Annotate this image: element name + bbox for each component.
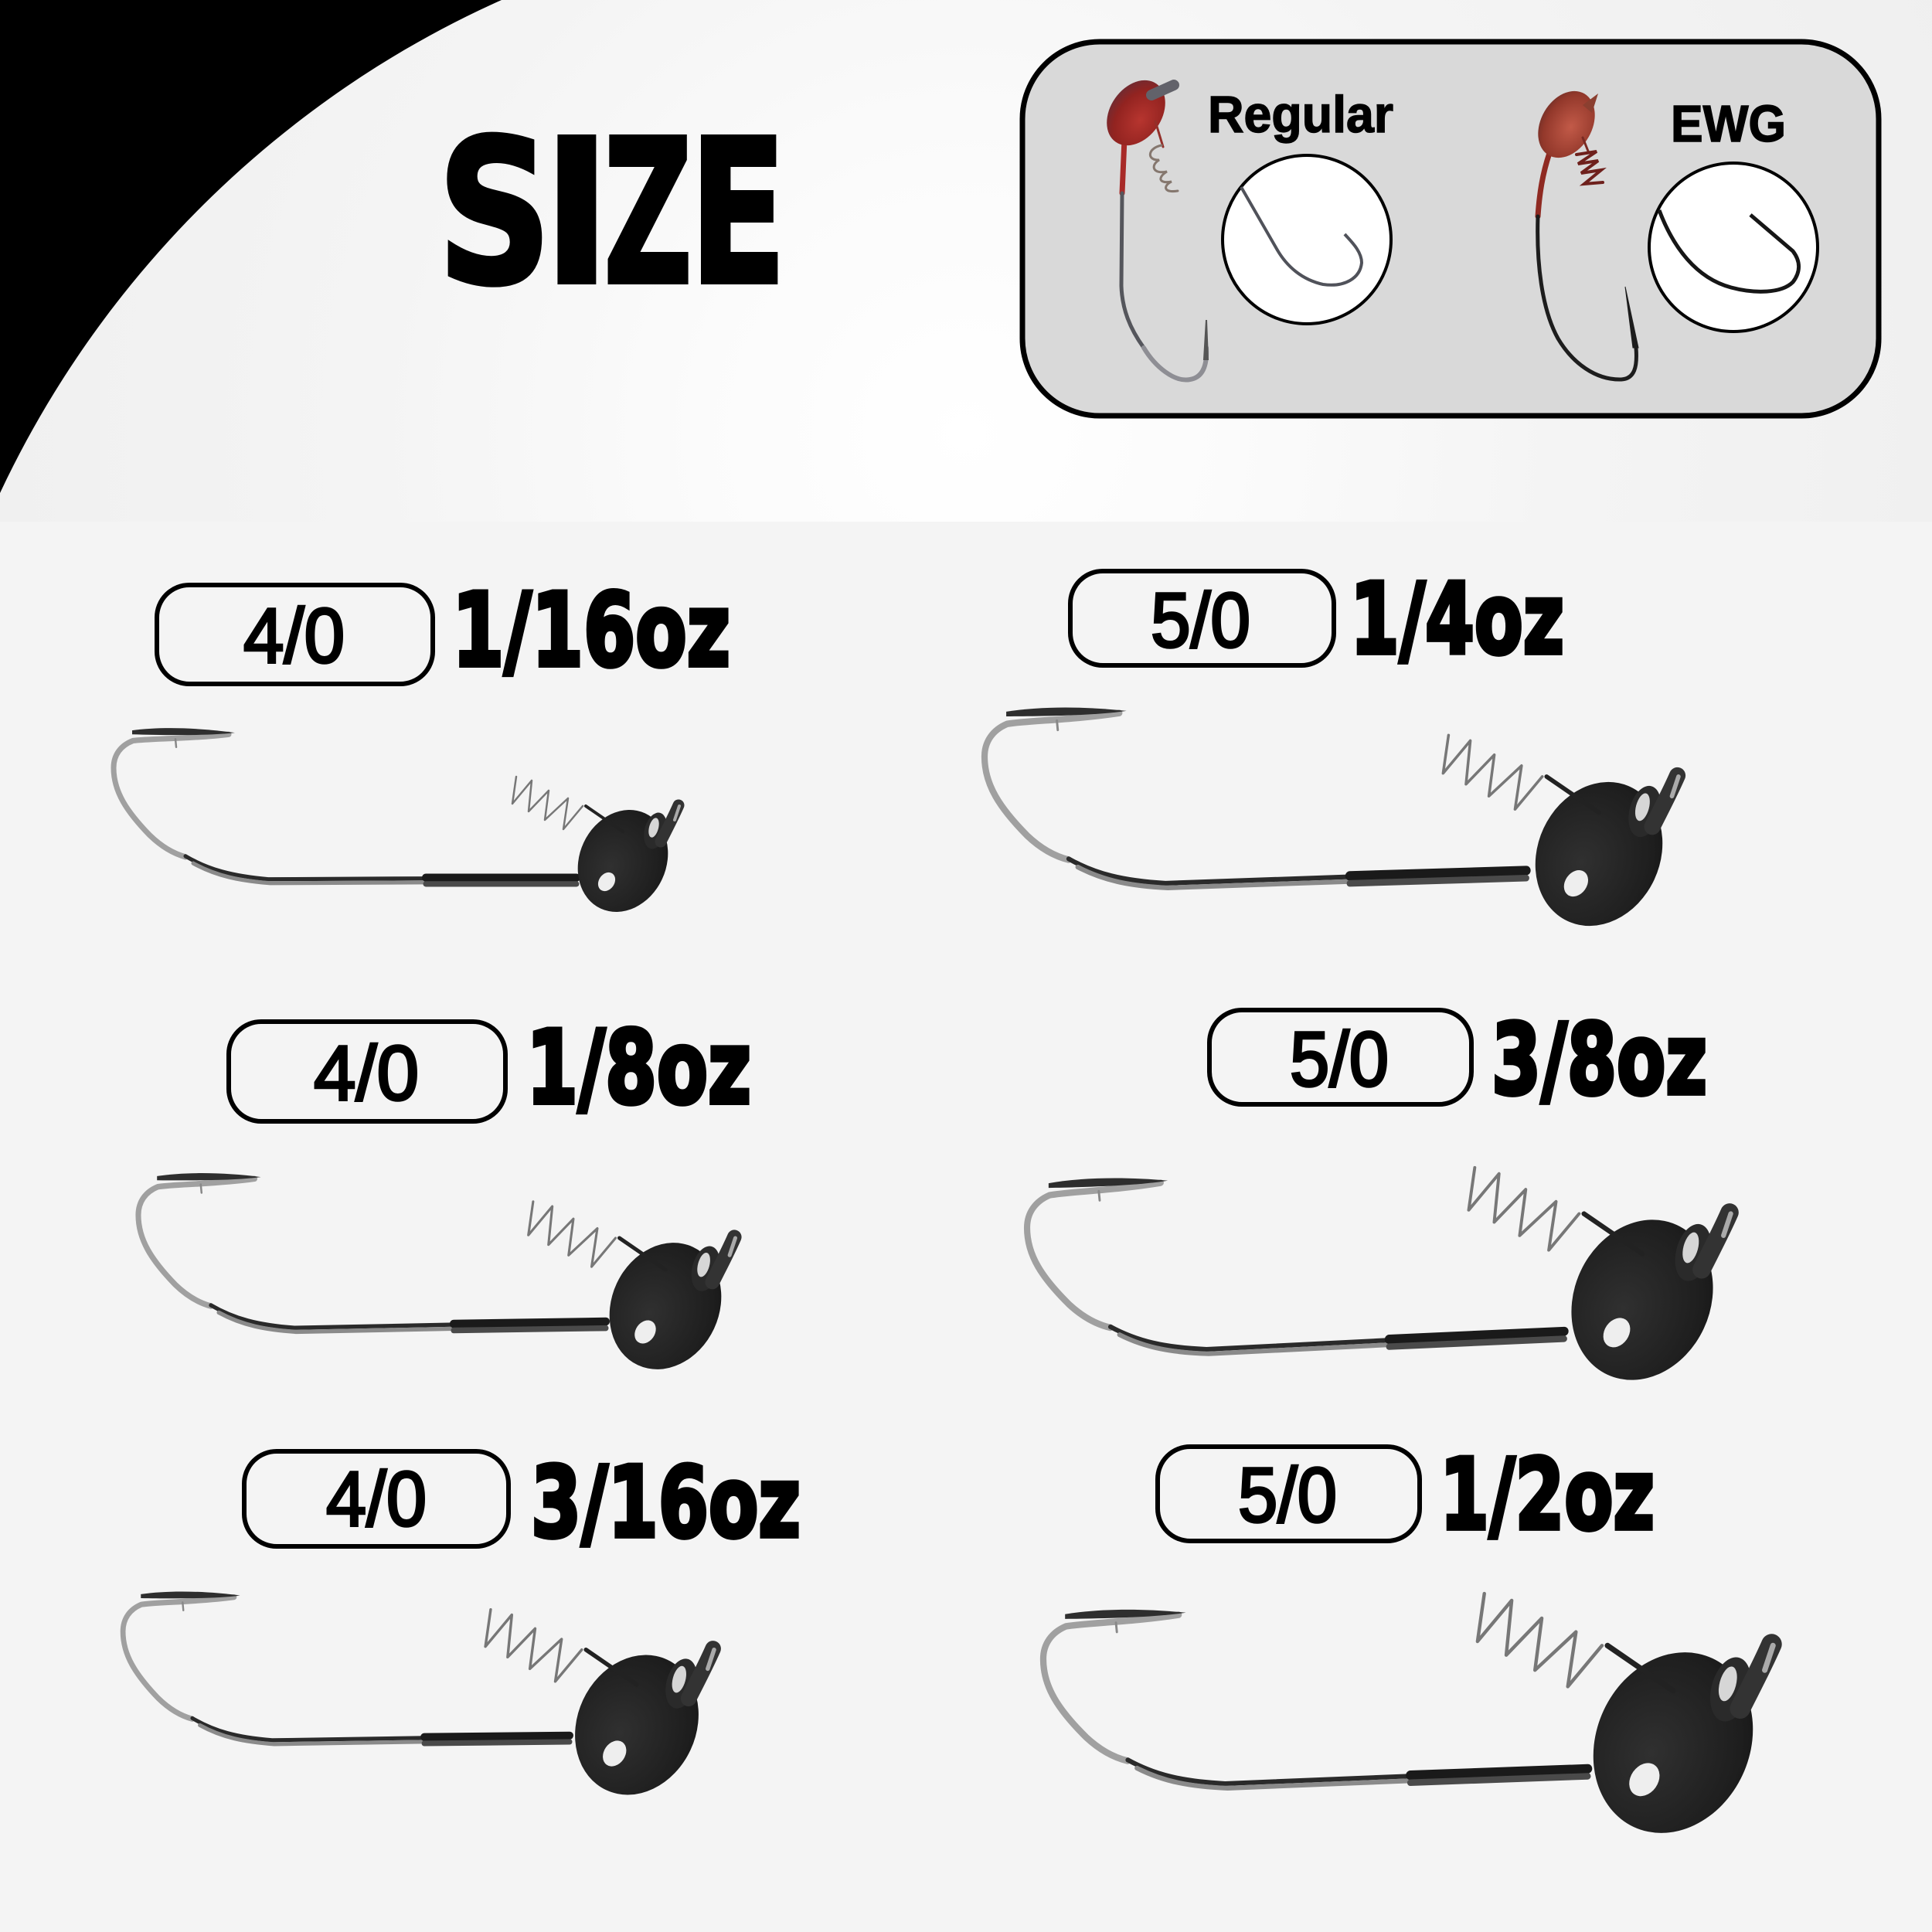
title: I [543, 97, 611, 330]
title: S [437, 98, 552, 330]
pill: 4/0: 4/0 [243, 593, 345, 679]
icon: jig 1/8oz [138, 1167, 742, 1388]
icon: EWG jig [1526, 81, 1638, 379]
icon: jig 1/16oz [114, 728, 684, 927]
size row: 5/0 3/8oz [1027, 1002, 1739, 1403]
weight: 1/16oz: 1/16oz [452, 573, 730, 689]
black corner shape [0, 0, 502, 493]
label: Regular: Regular [1208, 86, 1393, 144]
title [437, 97, 787, 331]
title: E [689, 97, 787, 331]
weight: 3/16oz: 3/16oz [531, 1445, 801, 1560]
icon: regular hook close-up [1223, 155, 1391, 324]
icon: EWG hook close-up [1649, 163, 1818, 332]
pill: 4/0 [229, 1022, 505, 1121]
size row: 4/0 1/8oz [138, 1010, 751, 1388]
pill: 4/0: 4/0 [326, 1456, 427, 1543]
icon: jig 3/16oz [123, 1587, 721, 1815]
weight: 3/8oz: 3/8oz [1492, 1002, 1707, 1117]
weight: 1/4oz: 1/4oz [1350, 562, 1564, 676]
weight: 1/8oz: 1/8oz [526, 1010, 751, 1127]
pill: 4/0 [244, 1451, 509, 1546]
icon: jig 1/4oz [985, 693, 1685, 947]
pill: 5/0 [1070, 571, 1334, 665]
pill: 5/0: 5/0 [1238, 1452, 1337, 1539]
pill: 5/0: 5/0 [1151, 577, 1250, 664]
size row: 5/0 1/4oz [985, 562, 1685, 947]
weight: 1/2oz: 1/2oz [1440, 1437, 1655, 1552]
pill: 5/0: 5/0 [1290, 1016, 1389, 1103]
size row: 5/0 1/2oz [1043, 1437, 1782, 1859]
size row: 4/0 3/16oz [123, 1445, 801, 1815]
icon: regular jig [1095, 69, 1208, 380]
pill: 5/0 [1209, 1010, 1471, 1104]
label: EWG: EWG [1671, 95, 1786, 153]
title: Z [604, 97, 692, 330]
icon: jig 3/8oz [1027, 1158, 1739, 1403]
panel: hook types [1022, 42, 1879, 416]
icon: jig 1/2oz [1043, 1593, 1782, 1859]
pill: 5/0 [1158, 1447, 1420, 1541]
pill: 4/0 [157, 585, 433, 684]
pill: 4/0: 4/0 [314, 1030, 419, 1117]
size row: 4/0 1/16oz [114, 573, 730, 927]
